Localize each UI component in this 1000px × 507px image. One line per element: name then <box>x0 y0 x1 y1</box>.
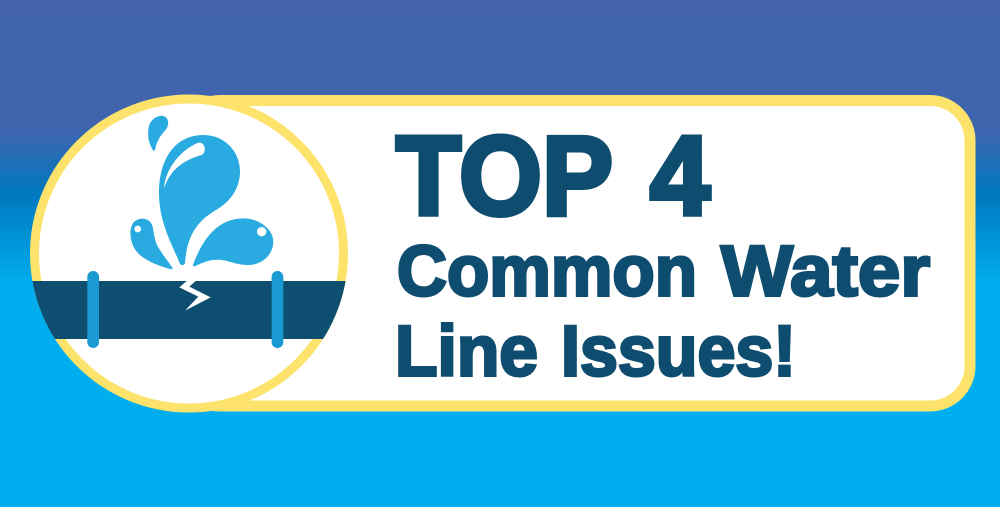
badge circle <box>34 99 344 408</box>
title panel <box>180 100 970 406</box>
subheading: issues: Issues! <box>561 312 796 392</box>
pipe clamp right <box>272 271 283 348</box>
subheading: line: Line <box>395 312 538 392</box>
subheading: common: Common <box>397 232 697 312</box>
large water drop <box>159 135 240 265</box>
pipe clamp left <box>87 271 99 348</box>
left drop <box>130 219 172 269</box>
left drop highlight <box>134 226 141 232</box>
icon: pipe <box>20 281 360 339</box>
heading: top: TOP <box>396 114 613 238</box>
pipe crack <box>179 281 211 311</box>
drop highlight <box>164 143 205 188</box>
icon: water splash <box>130 116 273 269</box>
subheading: water: Water <box>721 232 930 312</box>
small top drop <box>148 116 168 151</box>
title text <box>395 114 930 392</box>
heading: 4: 4 <box>650 114 710 238</box>
circular icon badge <box>20 99 360 408</box>
right drop <box>193 218 273 267</box>
right drop highlight <box>257 227 266 236</box>
